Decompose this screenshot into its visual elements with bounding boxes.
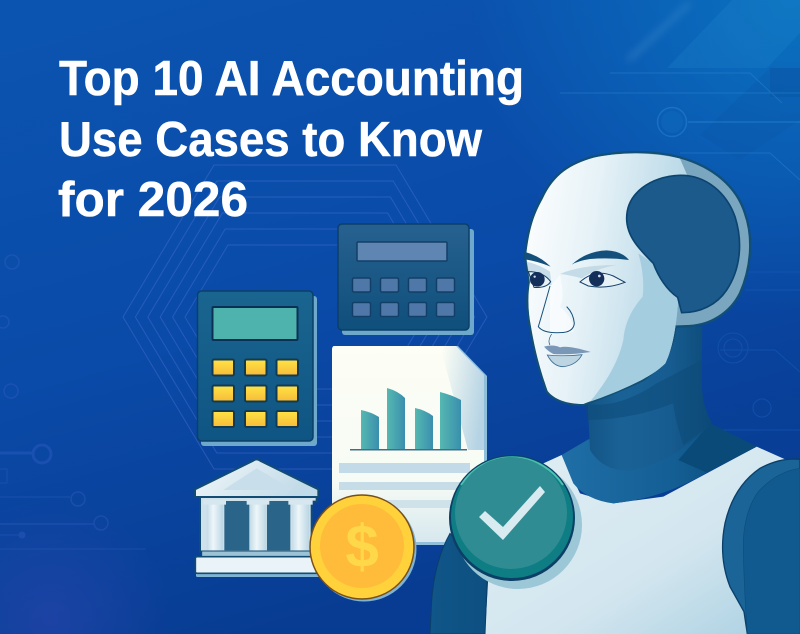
icon: check badge: [449, 455, 582, 589]
title: Top 10 AI Accounting: [59, 52, 524, 106]
nose shade: [550, 275, 573, 334]
title: [58, 52, 524, 227]
chin shadow: [585, 360, 712, 445]
icon: yellow key calculator: [198, 291, 317, 446]
eyebrows: [525, 250, 629, 267]
left arm: [430, 533, 487, 634]
cheek shade: [590, 253, 678, 402]
robot body: [430, 327, 800, 634]
icon: dollar coin: $: [345, 513, 379, 580]
check mark: [479, 486, 545, 540]
head shell: [525, 152, 750, 405]
robot head: [525, 152, 750, 405]
cap: [627, 175, 740, 313]
lips: [544, 334, 591, 367]
icon: bank building: [195, 459, 320, 577]
collar: [562, 423, 757, 503]
title: for 2026: [58, 173, 248, 227]
face: [526, 154, 687, 404]
shirt: [485, 447, 787, 634]
neck: [573, 327, 712, 471]
nose: [538, 286, 574, 333]
icon: dollar coin: [310, 495, 416, 602]
eyes: [528, 271, 625, 287]
title: Use Cases to Know: [59, 113, 483, 167]
icon: dark calculator: [338, 224, 474, 335]
right arm: [723, 459, 800, 634]
document with bar chart: [332, 346, 487, 545]
eye sockets: [527, 262, 617, 285]
chart bars: [361, 388, 461, 449]
